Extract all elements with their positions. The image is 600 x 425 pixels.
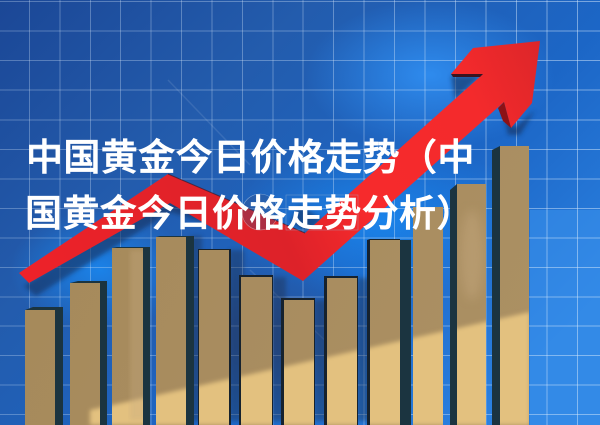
title text [25, 137, 475, 234]
column sides [25, 146, 529, 425]
arrow upper barb shadow edge [451, 74, 483, 77]
arrow top edge shadow [168, 174, 305, 233]
watermark logo [242, 194, 358, 230]
arrow body [19, 41, 540, 283]
title line 1: 中国黄金今日价格走势（中 [26, 137, 475, 178]
column shadows on wall [190, 236, 372, 421]
column fronts [25, 146, 529, 425]
red trend arrow [19, 41, 540, 283]
bar chart: gold columns [25, 146, 529, 425]
title line 2: 国黄金今日价格走势分析） [25, 193, 474, 234]
arrow barb dark face [498, 102, 511, 128]
wall shadow of arrow [24, 76, 535, 296]
